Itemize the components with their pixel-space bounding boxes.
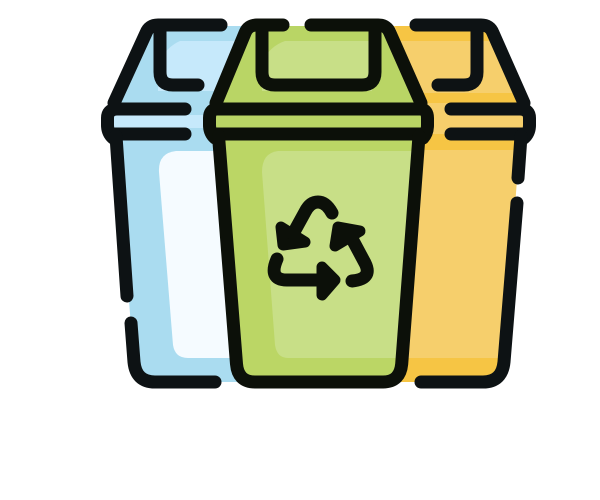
yellow bin fill xyxy=(380,26,525,382)
blue rim highlight xyxy=(112,115,232,128)
yellow bin lid outline xyxy=(416,25,530,138)
yellow lid shade top xyxy=(395,26,491,41)
yellow under-rim shade xyxy=(420,134,520,150)
green body highlight xyxy=(262,151,414,358)
blue bin body outline xyxy=(116,136,215,382)
recycle arrow: top left xyxy=(281,202,332,245)
icon: blue bin xyxy=(108,25,260,382)
yellow bottom shade xyxy=(395,358,502,382)
green bin body outline xyxy=(218,136,419,382)
yellow lid shade lower xyxy=(420,93,518,103)
green bin lid outline xyxy=(210,25,428,138)
icon: green bin xyxy=(210,25,428,382)
yellow bin body outline xyxy=(421,136,521,382)
blue bin lid outline xyxy=(108,25,221,138)
recycle arrow: right xyxy=(335,227,367,281)
green bin body fill xyxy=(218,134,418,382)
blue lid highlight xyxy=(158,41,250,91)
blue bin lid fill xyxy=(108,26,260,140)
blue body highlight xyxy=(159,151,250,358)
blue bin body fill xyxy=(116,134,250,382)
icon: yellow bin xyxy=(380,25,530,382)
green lid highlight xyxy=(262,41,372,91)
green bin lid fill xyxy=(214,26,424,134)
recycle arrow: bottom xyxy=(274,259,335,295)
icon: recycling symbol xyxy=(274,202,367,295)
